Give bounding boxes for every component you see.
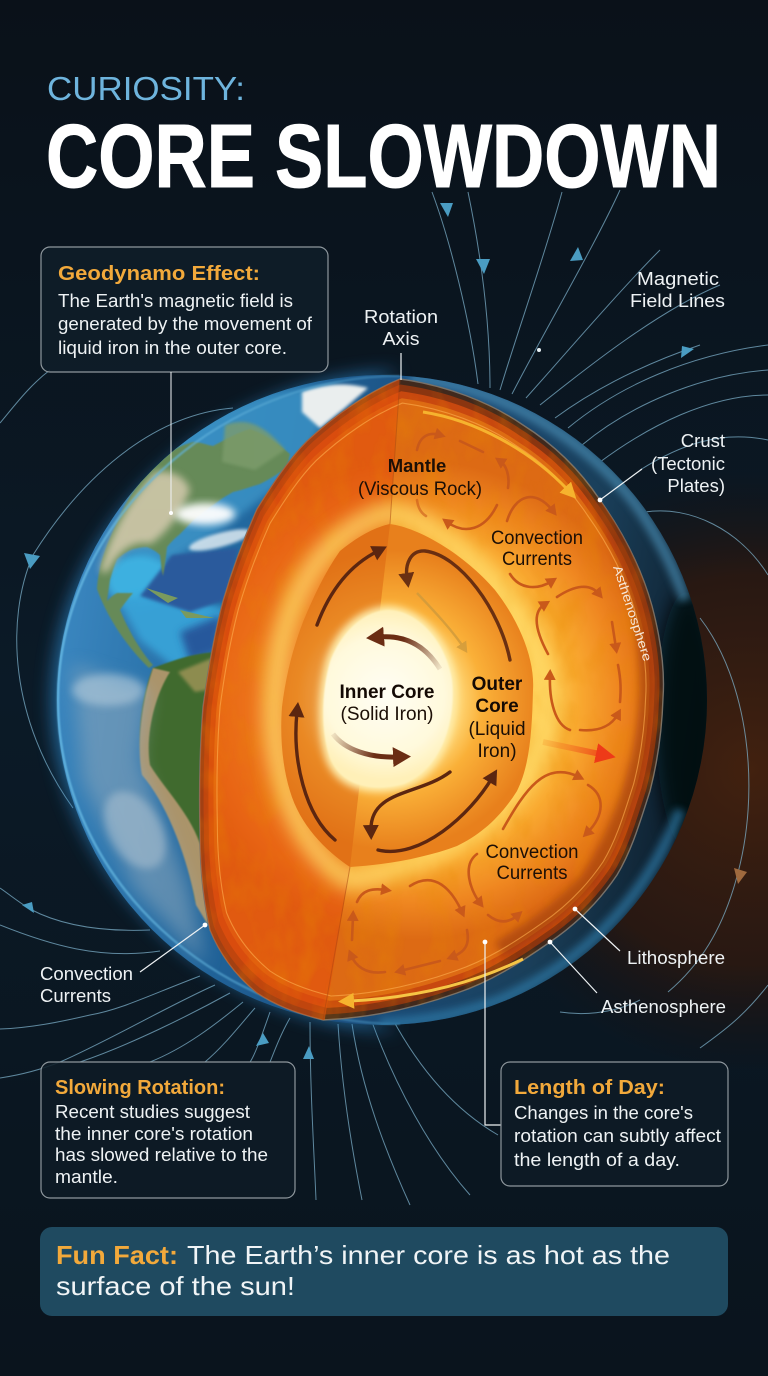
night side shadow <box>652 588 707 844</box>
panel: length of day <box>501 1062 728 1186</box>
Caribbean sea <box>121 598 222 663</box>
panel: fun fact: surface of the sun! <box>56 1271 295 1301</box>
label: convection currents left: Convection <box>40 963 133 984</box>
inner core halo <box>319 606 457 792</box>
label: convection currents left <box>40 923 207 1006</box>
label: asthenosphere along rim: Asthenosphere <box>610 564 654 663</box>
label: magnetic field lines: Magnetic <box>637 268 719 289</box>
North America <box>97 429 290 668</box>
flame texture and shaded left half <box>180 370 670 1030</box>
label: crust: Plates) <box>667 475 725 496</box>
far rim light bottom <box>380 810 680 1024</box>
label: lithosphere <box>573 907 725 968</box>
panel: fun fact <box>40 1227 728 1316</box>
label: inner core: Inner Core <box>340 682 434 703</box>
label: rotation axis <box>364 306 438 380</box>
Amazon highlands <box>177 657 210 694</box>
Caribbean islands <box>146 588 214 618</box>
ocean sphere <box>57 375 707 1025</box>
label: crust: (Tectonic <box>651 453 725 474</box>
panel: fun fact: Fun Fact: <box>56 1240 178 1270</box>
gold boundary arrows <box>350 412 568 1001</box>
field line arrowheads <box>22 203 747 1059</box>
outer core <box>281 524 533 867</box>
panel: length of day: rotation can subtly affect <box>514 1125 721 1146</box>
panel: geodynamo effect: generated by the movement of <box>58 313 313 334</box>
lithosphere boundary line <box>217 403 646 996</box>
label: mantle: Mantle <box>388 455 446 476</box>
clouds over Pacific <box>72 665 205 965</box>
seam lines <box>323 379 400 1020</box>
atmospheric glow <box>52 372 400 1030</box>
panel: length of day: Length of Day: <box>514 1077 665 1099</box>
magnetic field lines <box>0 190 768 1205</box>
cutaway earth interior <box>180 370 670 1030</box>
globe <box>52 372 720 1030</box>
panel: length of day: the length of a day. <box>514 1149 680 1170</box>
panel: slowing rotation: Recent studies suggest <box>55 1101 250 1122</box>
callout leader: length of day <box>483 940 501 1125</box>
clouds over Atlantic <box>175 503 235 525</box>
label: crust: Crust <box>681 430 725 451</box>
label: magnetic field lines: Field Lines <box>630 290 725 311</box>
mantle convection arrows <box>351 434 621 973</box>
label: convection currents lower: Convection <box>486 842 578 863</box>
inner core rotation arrows <box>333 637 440 757</box>
label: convection currents left: Currents <box>40 985 111 1006</box>
inner core bright centre <box>323 610 453 788</box>
label: inner core <box>340 682 434 725</box>
panel: slowing rotation: the inner core's rotation <box>55 1123 253 1144</box>
label: magnetic field lines <box>630 268 725 311</box>
title kicker: CURIOSITY: <box>47 70 245 107</box>
panel: slowing rotation <box>41 1062 295 1198</box>
crust rim <box>200 379 664 1020</box>
label: convection currents upper: Convection <box>491 528 583 549</box>
North America tan highlands <box>100 472 190 572</box>
panel: geodynamo effect: Geodynamo Effect: <box>58 263 260 285</box>
asthenosphere band <box>208 391 655 1008</box>
northern sea <box>120 385 340 560</box>
land and clouds <box>72 385 368 965</box>
lithosphere band <box>204 384 660 1015</box>
panel: geodynamo effect <box>41 247 328 372</box>
label: asthenosphere <box>548 940 726 1017</box>
label: lithosphere: Lithosphere <box>627 947 725 968</box>
far rim light top <box>410 378 685 600</box>
panel: geodynamo effect: liquid iron in the outer core. <box>58 337 287 358</box>
Gulf of Mexico <box>108 551 167 602</box>
label: convection currents lower: Currents <box>496 863 568 884</box>
panel: slowing rotation: mantle. <box>55 1166 118 1187</box>
panel: length of day: Changes in the core's <box>514 1102 693 1123</box>
outer core circulation arrows <box>296 551 510 851</box>
panel: geodynamo effect: The Earth's magnetic field is <box>58 290 293 311</box>
label: convection currents lower <box>486 842 578 884</box>
panel: slowing rotation: has slowed relative to the <box>55 1144 268 1165</box>
outer core left shading <box>281 524 390 867</box>
label: mantle: (Viscous Rock) <box>358 479 482 500</box>
label: outer core: Core <box>475 696 519 717</box>
Andes coastline <box>140 668 208 925</box>
label: outer core: Iron) <box>477 741 517 762</box>
label: rotation axis: Rotation <box>364 306 438 327</box>
panel: fun fact: The Earth’s inner core is as hot as the <box>187 1240 670 1270</box>
label: asthenosphere: Asthenosphere <box>601 996 726 1017</box>
South America <box>139 652 211 924</box>
label: crust <box>598 430 725 502</box>
label: inner core: (Solid Iron) <box>340 704 434 725</box>
label: outer core: (Liquid <box>468 719 526 740</box>
Atlantic deep water <box>140 548 238 612</box>
background warm glow <box>440 470 768 1070</box>
label: outer core: Outer <box>472 674 523 695</box>
label: convection currents upper <box>491 528 583 570</box>
label: mantle <box>358 455 482 500</box>
globe rim light left <box>58 376 400 1024</box>
label: outer core <box>468 674 526 762</box>
label: convection currents upper: Currents <box>502 549 572 570</box>
panel: slowing rotation: Slowing Rotation: <box>55 1077 225 1099</box>
north ice <box>302 385 368 428</box>
label: rotation axis: Axis <box>382 328 420 349</box>
callout leader: geodynamo <box>169 372 173 515</box>
Arctic land <box>222 422 285 470</box>
mantle <box>214 398 650 1001</box>
title <box>46 70 721 207</box>
